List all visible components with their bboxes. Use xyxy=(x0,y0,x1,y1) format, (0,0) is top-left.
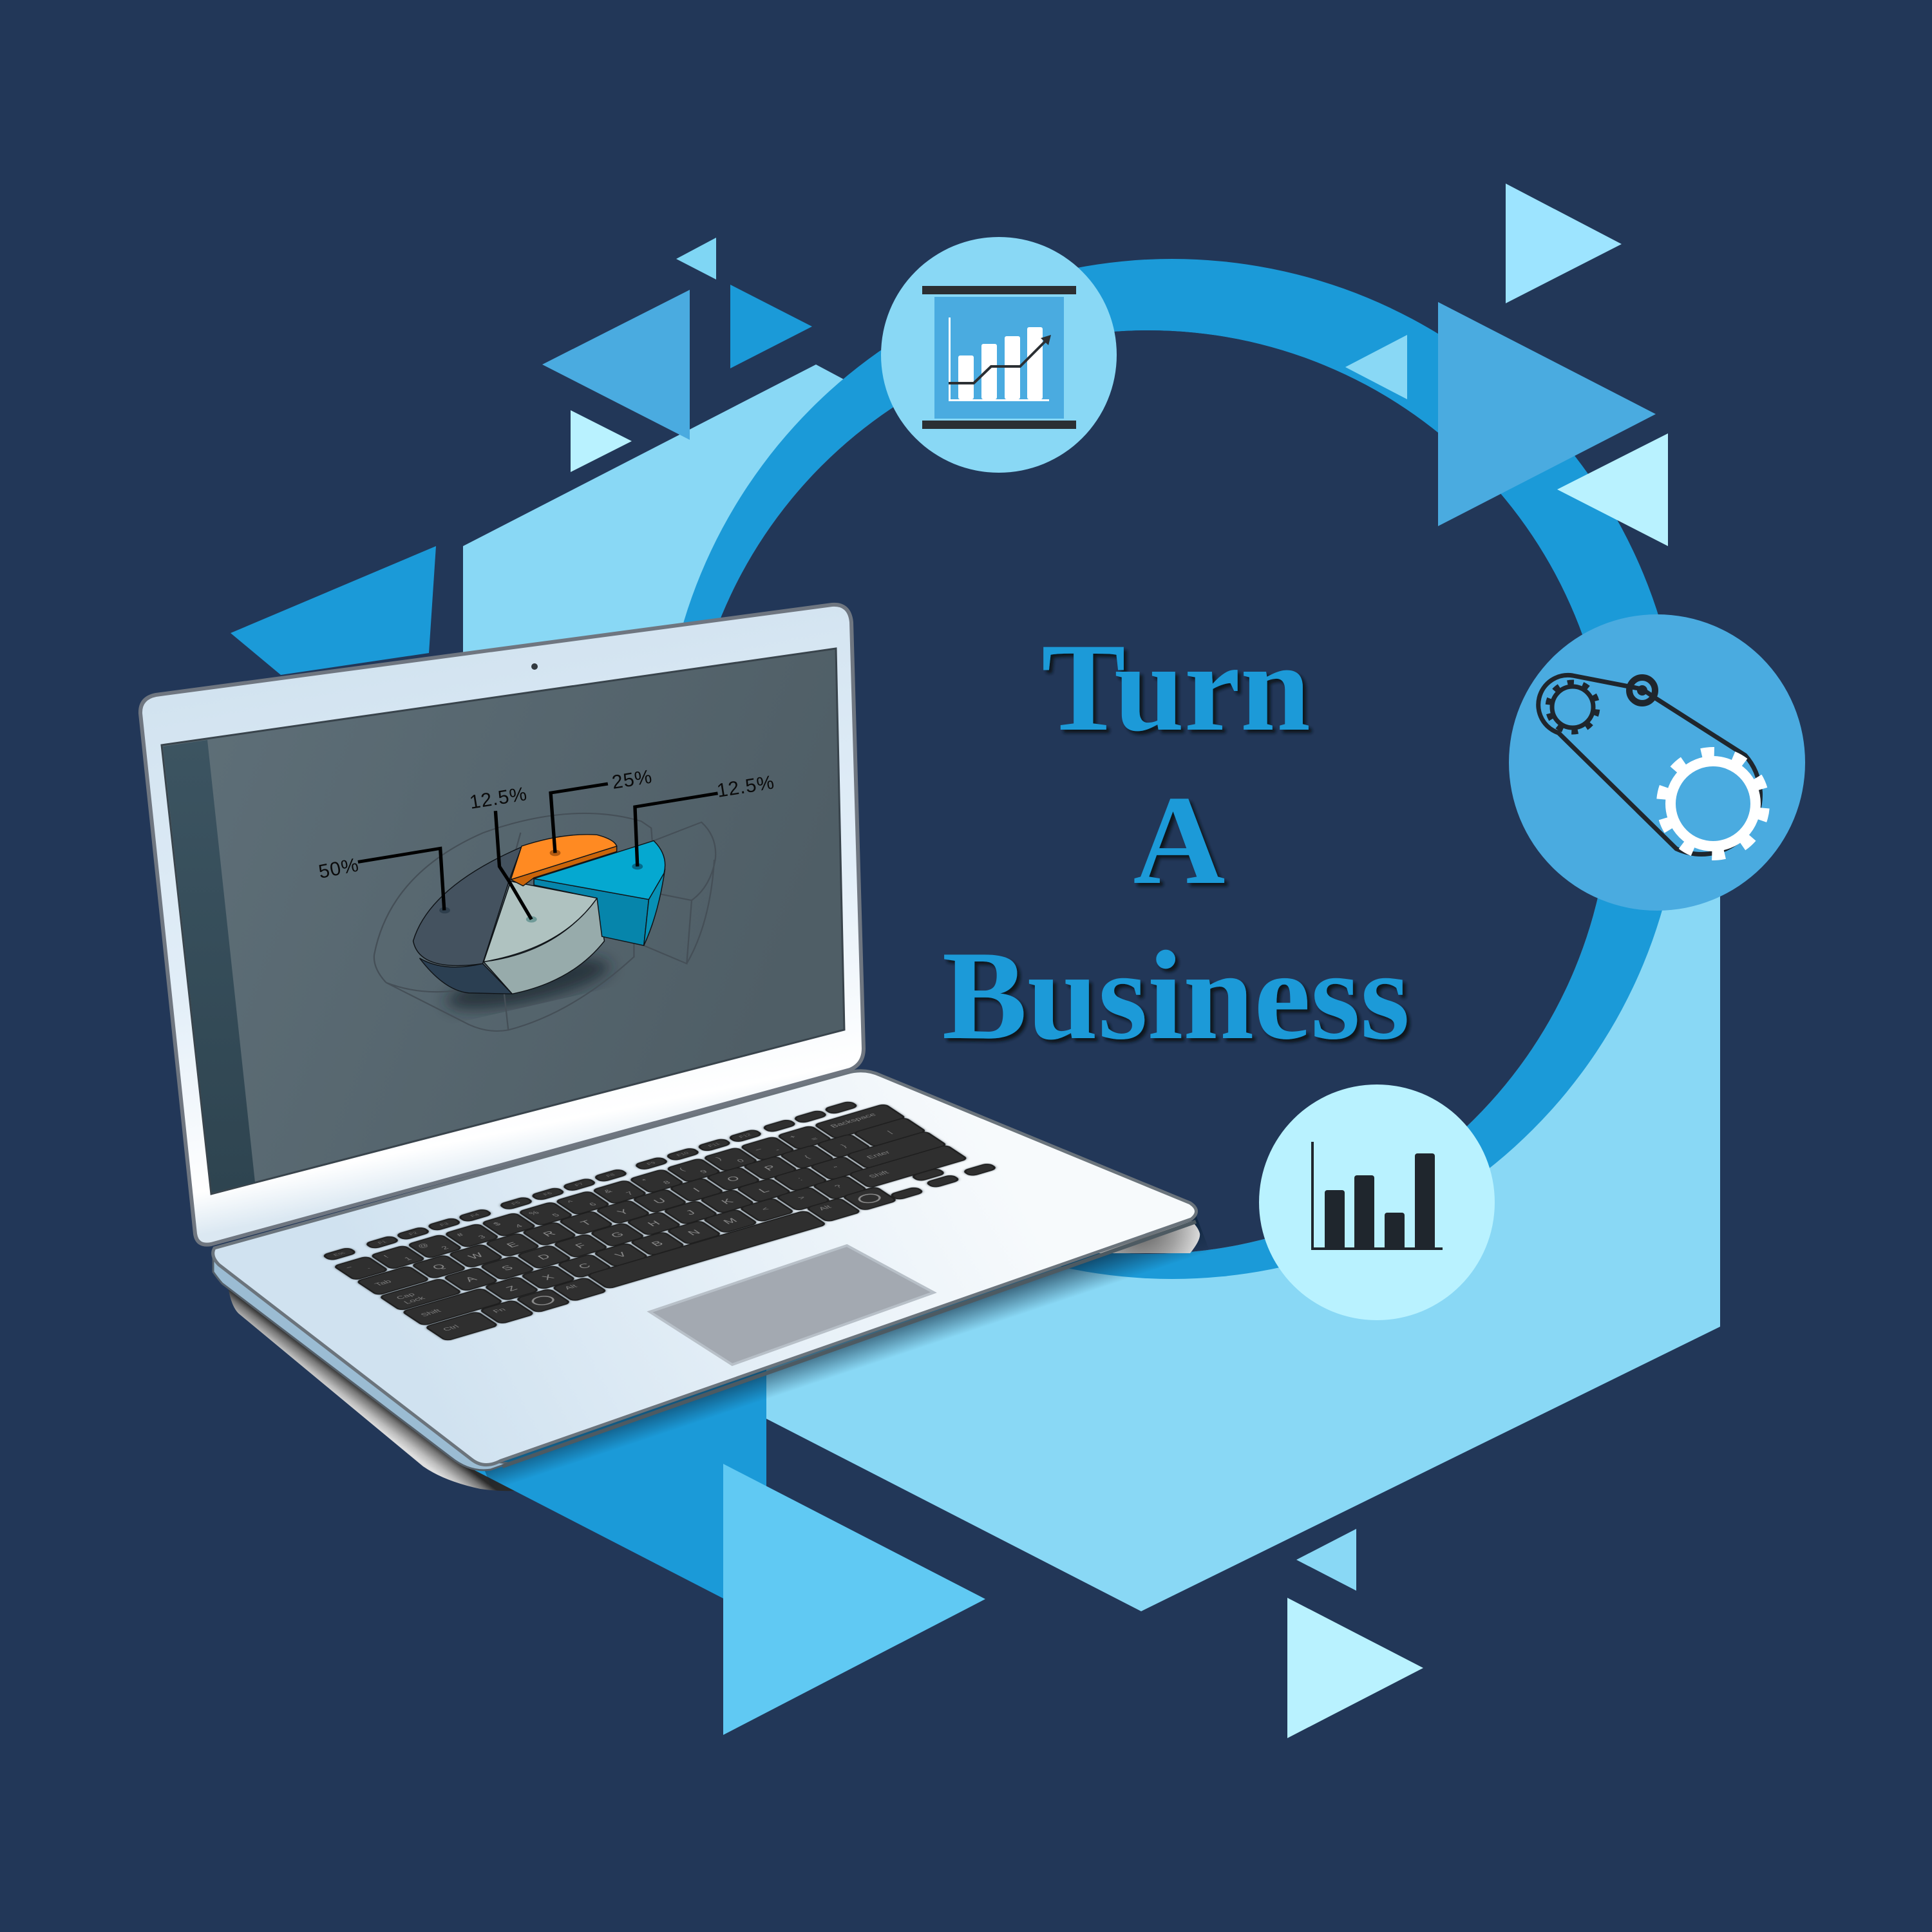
label 50%: 50% xyxy=(317,854,361,883)
laptop xyxy=(140,605,1197,1470)
ZXCV row: B xyxy=(649,1240,666,1248)
laptop base xyxy=(213,1071,1197,1465)
title: Turn A Business: A xyxy=(1133,770,1225,911)
ASDF row xyxy=(375,1132,951,1311)
ASDF row: H xyxy=(645,1219,663,1227)
triangle top left small xyxy=(676,238,716,279)
pie chart xyxy=(358,784,718,1031)
laptop shadow right xyxy=(1088,1221,1200,1256)
large gear xyxy=(1662,752,1765,855)
small gear xyxy=(1548,683,1597,732)
number row: * xyxy=(640,1178,650,1183)
QWERTY row: P xyxy=(761,1164,779,1172)
number row: ( xyxy=(677,1167,687,1172)
triangle top left pale xyxy=(571,410,632,472)
lower dark blue arrow piece xyxy=(386,1352,766,1623)
ZXCV row: Z xyxy=(504,1284,520,1293)
function keys: F2 xyxy=(407,1231,419,1236)
title: Turn A Business xyxy=(942,618,1410,1066)
function keys: F6 xyxy=(542,1191,554,1197)
ZXCV row: Shift xyxy=(419,1308,443,1318)
title: Turn A Business: Turn xyxy=(1041,618,1311,757)
number row: 6 xyxy=(587,1202,598,1207)
laptop shadow left xyxy=(222,1282,515,1491)
orange slice top xyxy=(511,835,617,880)
number row: 0 xyxy=(735,1158,746,1164)
ghost outlines xyxy=(374,813,715,1031)
number row: - xyxy=(773,1148,782,1152)
function keys: Esc xyxy=(332,1251,347,1257)
ASDF row: A xyxy=(462,1275,480,1283)
QWERTY row xyxy=(354,1117,929,1295)
laptop shadow on blue shapes xyxy=(483,1213,1224,1546)
pie shadow xyxy=(442,948,614,1020)
label 12.5% left: 12.5% xyxy=(468,783,529,813)
number row: ^ xyxy=(566,1200,576,1205)
number row: 1 xyxy=(402,1256,413,1262)
function keys: F8 xyxy=(605,1173,616,1178)
light blue arrow upper band xyxy=(463,348,966,663)
number row: 7 xyxy=(624,1191,635,1196)
blue slice top xyxy=(534,840,665,900)
belt xyxy=(1539,675,1761,854)
blue slice side xyxy=(534,878,649,945)
QWERTY row: Y xyxy=(614,1208,632,1216)
number row: @ xyxy=(415,1242,431,1249)
bottom row xyxy=(417,1187,905,1341)
dark slice 50% xyxy=(413,847,522,965)
leader lines xyxy=(358,784,718,920)
ZXCV row: ? xyxy=(833,1184,844,1189)
circle icon: belt and gears xyxy=(1509,614,1805,911)
laptop screen xyxy=(162,649,844,1194)
light slice side xyxy=(484,898,605,994)
arrow keys xyxy=(876,1156,999,1200)
number row: # xyxy=(455,1232,466,1238)
light slice top xyxy=(484,882,597,961)
laptop base side xyxy=(213,1249,509,1470)
triangle bottom pale xyxy=(1287,1598,1423,1738)
QWERTY row: R xyxy=(540,1229,558,1238)
ZXCV row: < xyxy=(759,1206,771,1212)
circle icon: bar chart xyxy=(1259,1084,1495,1320)
ZXCV row: N xyxy=(685,1228,703,1236)
number row: Backspace xyxy=(828,1112,878,1129)
ASDF row: S xyxy=(498,1264,516,1272)
function keys: F12 xyxy=(737,1133,753,1139)
ring centre xyxy=(687,330,1610,1254)
upper dark blue arrow piece xyxy=(231,546,436,675)
number row: 5 xyxy=(550,1212,562,1218)
bottom row: Fn xyxy=(491,1307,507,1314)
ZXCV row: > xyxy=(796,1195,808,1200)
QWERTY row: Q xyxy=(430,1262,448,1271)
function keys: F1 xyxy=(376,1240,388,1245)
bottom row: Alt xyxy=(563,1283,580,1291)
ASDF row: Cap xyxy=(394,1292,417,1300)
function keys: F4 xyxy=(469,1213,481,1218)
function keys: F5 xyxy=(510,1200,522,1206)
ASDF row: D xyxy=(535,1253,553,1261)
number row xyxy=(334,1104,905,1280)
function keys: F9 xyxy=(645,1160,657,1166)
QWERTY row: I xyxy=(690,1186,703,1193)
QWERTY row: U xyxy=(650,1197,668,1205)
label 25%: 25% xyxy=(611,766,654,793)
number row: = xyxy=(809,1136,820,1142)
ZXCV row: X xyxy=(540,1273,557,1282)
number row: ) xyxy=(714,1156,723,1161)
function keys: F10 xyxy=(675,1151,690,1157)
ASDF row: F xyxy=(573,1242,589,1250)
keyboard xyxy=(319,1091,1007,1341)
dark slice side xyxy=(420,958,512,994)
idler pulley xyxy=(1629,677,1655,703)
number row: & xyxy=(602,1188,614,1194)
QWERTY row: | xyxy=(886,1130,894,1135)
ASDF row: J xyxy=(683,1209,698,1217)
laptop lid xyxy=(140,605,864,1245)
ASDF row: Lock xyxy=(402,1295,428,1305)
ASDF row: K xyxy=(718,1197,735,1206)
triangle top right pale xyxy=(1506,184,1622,303)
triangle on ring xyxy=(1345,335,1407,399)
ASDF row: G xyxy=(608,1230,627,1239)
base front underside line xyxy=(502,1222,1196,1466)
ASDF row: Enter xyxy=(865,1150,892,1160)
QWERTY row: W xyxy=(466,1251,486,1260)
number row: ` xyxy=(366,1267,375,1272)
QWERTY row: E xyxy=(504,1240,521,1249)
function keys: F3 xyxy=(438,1222,450,1227)
number row: 3 xyxy=(476,1234,488,1240)
number row: _ xyxy=(750,1145,762,1151)
QWERTY row: { xyxy=(802,1155,811,1159)
ZXCV row: C xyxy=(575,1262,593,1270)
QWERTY row: T xyxy=(578,1218,594,1227)
light blue arrow lower band xyxy=(766,837,1720,1611)
triangle top right large xyxy=(1438,302,1656,526)
number row: $ xyxy=(491,1221,503,1227)
title: Turn A Business: Business xyxy=(942,925,1410,1066)
ZXCV row: M xyxy=(721,1217,740,1226)
number row: % xyxy=(527,1210,541,1217)
triangle top left large xyxy=(542,290,690,440)
blue slice outer xyxy=(644,869,665,945)
number row: 9 xyxy=(698,1169,709,1174)
function keys: F7 xyxy=(573,1182,585,1187)
ZXCV row: Shift xyxy=(867,1170,891,1179)
leader anchor dots xyxy=(439,849,643,922)
ZXCV row xyxy=(395,1145,974,1325)
orange slice side xyxy=(511,846,617,886)
screen reflection strip xyxy=(163,740,255,1193)
triangle bottom small xyxy=(1296,1529,1356,1591)
triangle top left blue xyxy=(730,285,812,368)
QWERTY row: Tab xyxy=(373,1279,393,1287)
number row: 2 xyxy=(439,1245,450,1251)
webcam xyxy=(531,663,538,670)
triangle bottom large xyxy=(723,1464,985,1735)
ASDF row: " xyxy=(832,1165,841,1170)
number row: + xyxy=(787,1134,799,1140)
ASDF row: : xyxy=(795,1177,804,1181)
circle icon: presentation chart xyxy=(881,237,1117,473)
function keys: F11 xyxy=(706,1142,721,1148)
function keys xyxy=(323,1100,858,1262)
bottom row: Ctrl xyxy=(441,1324,461,1332)
QWERTY row: } xyxy=(839,1144,848,1148)
label 12.5% right: 12.5% xyxy=(715,772,776,802)
ring xyxy=(662,259,1682,1279)
ZXCV row: V xyxy=(612,1251,630,1259)
QWERTY row: O xyxy=(724,1175,743,1183)
ASDF row: L xyxy=(756,1186,772,1194)
number row: 8 xyxy=(661,1180,672,1185)
trackpad xyxy=(650,1245,934,1365)
number row: ~ xyxy=(343,1265,355,1271)
bottom row: Alt xyxy=(817,1204,833,1211)
number row: 4 xyxy=(513,1223,524,1229)
triangle right pale xyxy=(1557,433,1668,546)
number row: ! xyxy=(382,1255,390,1259)
